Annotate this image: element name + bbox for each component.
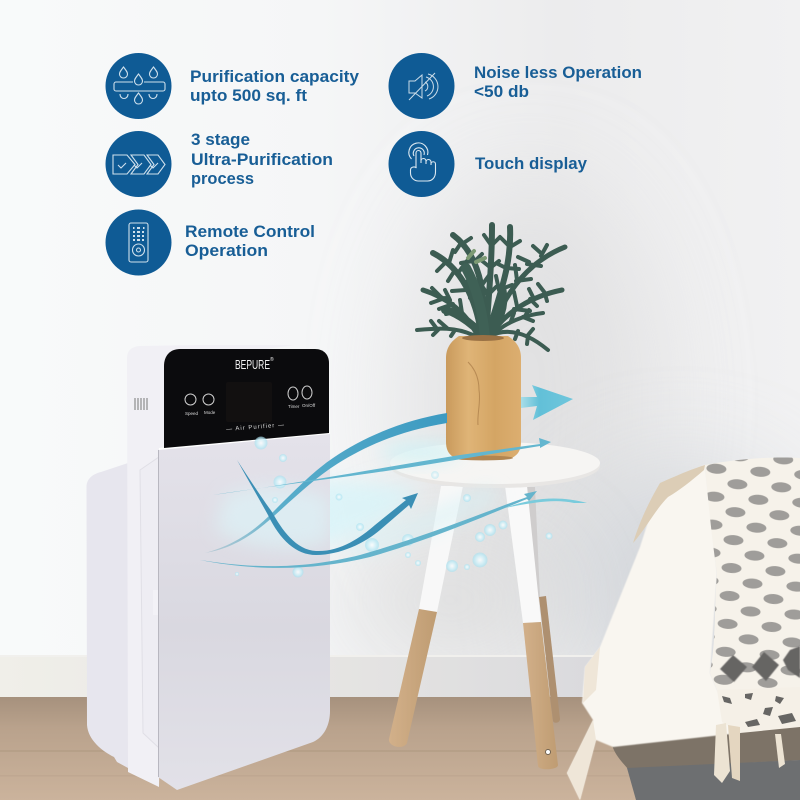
label: Operation	[185, 242, 268, 260]
side table	[389, 442, 600, 769]
back leg	[527, 487, 560, 723]
feature: purification capacity	[106, 53, 360, 119]
label: upto 500 sq. ft	[190, 87, 308, 105]
baseboard	[0, 655, 640, 698]
label: Touch display	[475, 155, 588, 173]
panel edge shadow	[158, 450, 160, 777]
display window	[226, 382, 272, 422]
plant	[417, 225, 565, 350]
arrow: S curve	[237, 460, 418, 555]
button labels	[185, 403, 316, 416]
button labels: Mode	[204, 410, 216, 415]
brand name: BEPURE	[235, 357, 270, 372]
large leaf motifs	[720, 646, 800, 682]
label: <50 db	[474, 83, 529, 101]
feature: three stage purification	[106, 131, 333, 197]
side filter slot	[140, 457, 160, 748]
vase	[446, 335, 521, 460]
control panel	[164, 349, 329, 448]
blanket fold	[717, 687, 800, 733]
arrow: lower stream	[200, 491, 537, 568]
feature list	[106, 53, 642, 276]
white throw	[567, 465, 740, 800]
patterned blanket	[705, 457, 800, 690]
left leg	[389, 486, 463, 747]
arrow: upper-right wisp	[505, 499, 587, 508]
airflow arrows	[200, 385, 587, 568]
icon: three check tags	[106, 131, 172, 197]
side housing	[127, 345, 295, 787]
arrow: thick rising stream	[205, 413, 447, 553]
table top	[390, 442, 600, 488]
label: Remote Control	[185, 223, 315, 241]
button labels: Timer	[288, 404, 300, 409]
front panel	[158, 433, 330, 790]
fronds	[417, 225, 565, 350]
front leg	[505, 486, 558, 769]
label: 3 stage	[191, 131, 250, 149]
mist	[225, 442, 500, 555]
label: Ultra-Purification	[191, 151, 333, 169]
touch buttons	[185, 386, 312, 405]
button labels: On/Off	[302, 403, 316, 408]
rear housing	[86, 463, 128, 768]
arrow: thin long stream	[213, 438, 551, 495]
control panel: ®	[270, 356, 274, 363]
product name: — Air Purifier —	[226, 422, 285, 433]
label: Purification capacity	[190, 68, 360, 86]
bed base	[612, 725, 800, 800]
button labels: Speed	[185, 411, 199, 416]
icon: remote control	[106, 210, 172, 276]
bubbles	[235, 436, 552, 578]
arrow: head behind vase	[521, 385, 573, 420]
icon: muted speaker	[388, 53, 454, 119]
icon: finger touch	[388, 131, 454, 197]
label: Noise less Operation	[474, 64, 642, 82]
side vent	[135, 398, 147, 410]
wooden floor	[0, 697, 800, 800]
panel mist	[215, 487, 330, 549]
air purifier	[86, 345, 330, 790]
feature: noise less operation	[388, 53, 642, 119]
bed	[567, 457, 800, 800]
label: process	[191, 170, 254, 188]
feature: touch display	[388, 131, 588, 197]
feature: remote control	[106, 210, 315, 276]
icon: water drops over filter	[106, 53, 172, 119]
fringe tassels	[714, 723, 785, 783]
